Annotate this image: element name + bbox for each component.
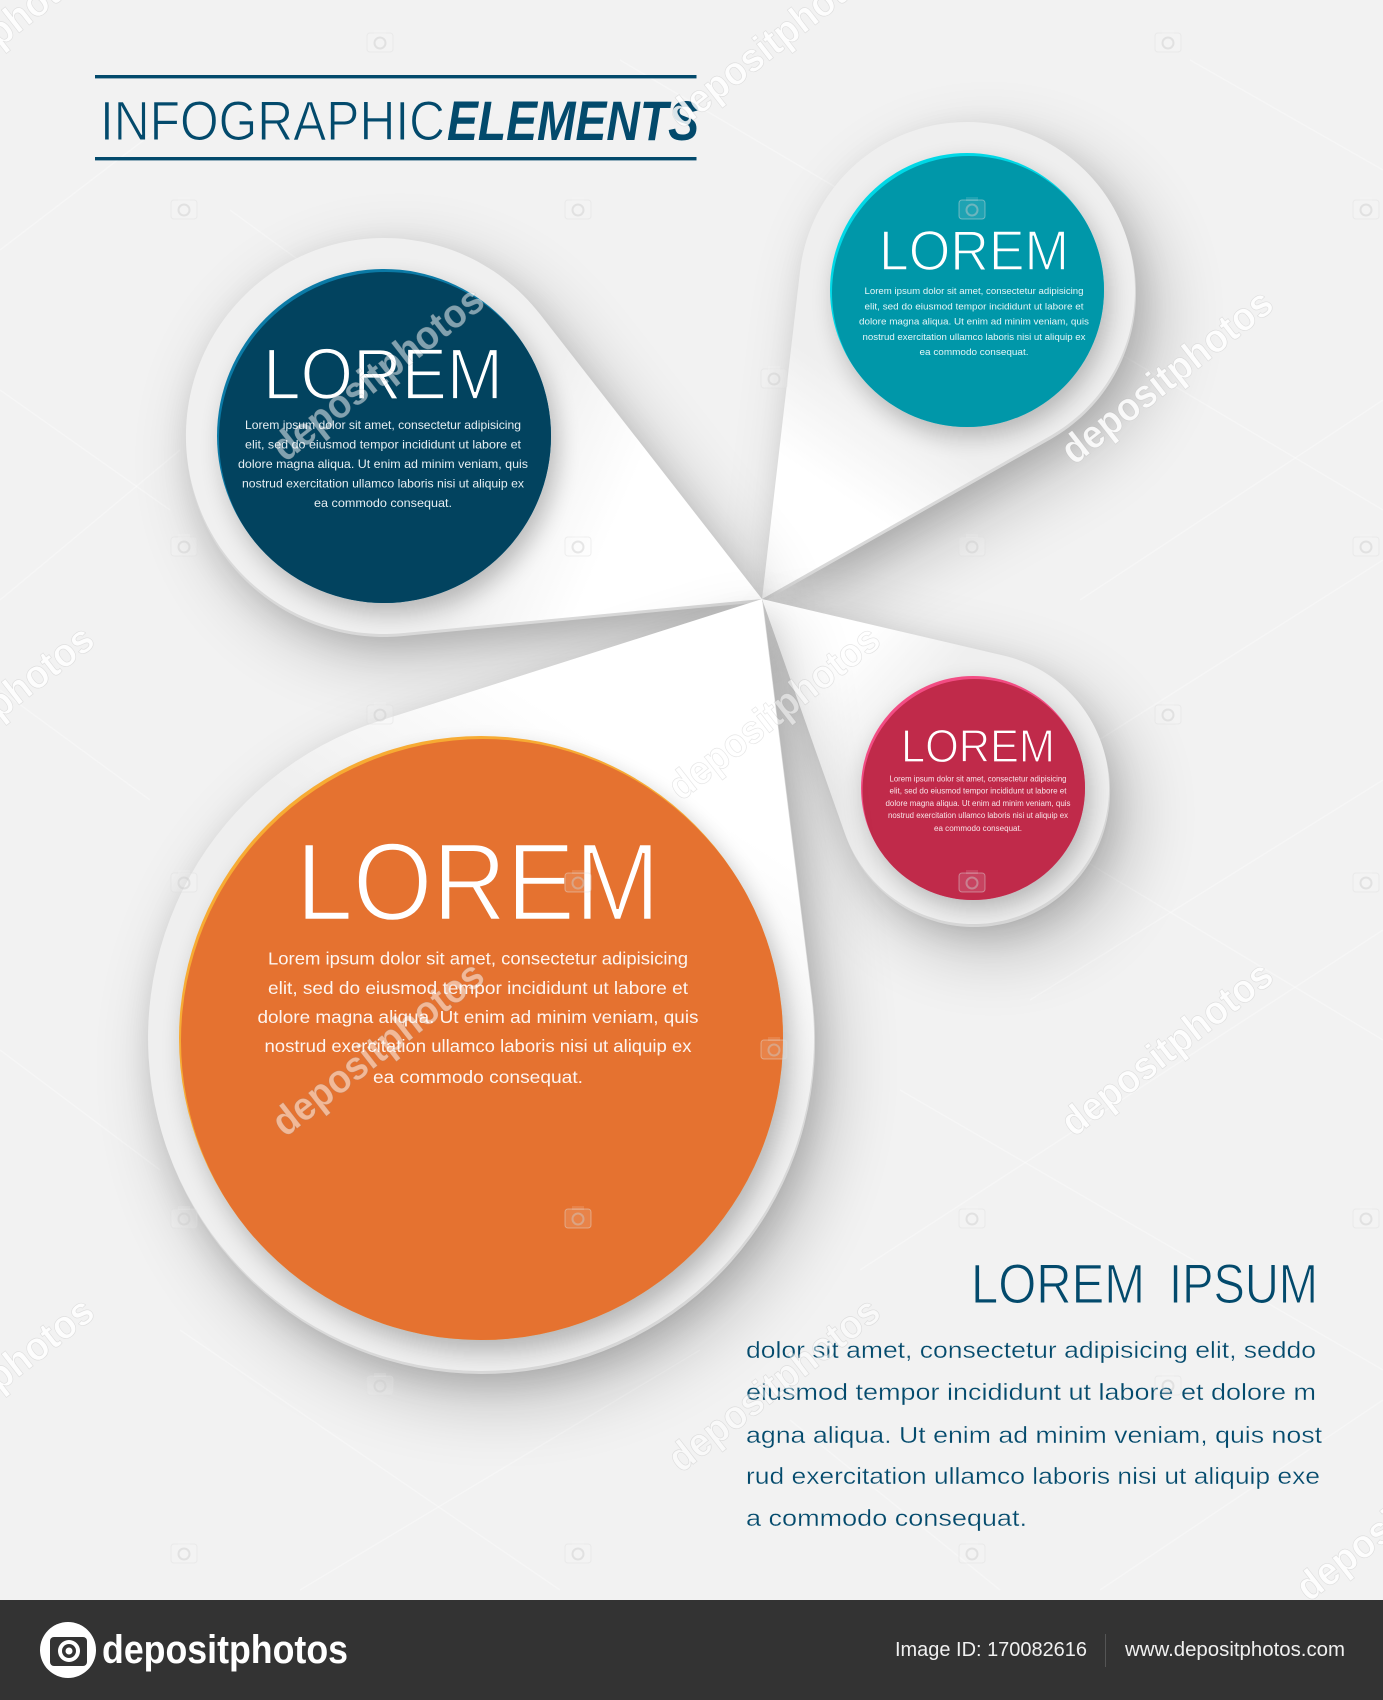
image id: Image ID: 170082616 — [895, 1639, 1087, 1661]
title: ELEMENTS — [447, 89, 699, 152]
title — [95, 75, 699, 160]
navy body text: ea commodo consequat. — [314, 497, 452, 510]
orange body text: Lorem ipsum dolor sit amet, consectetur adipisicing — [268, 949, 688, 969]
panel: navy teardrop — [186, 238, 778, 656]
text block: lorem ipsum: dolor sit amet, consectetur adipisicing elit, seddo — [746, 1337, 1316, 1363]
crimson body text: ea commodo consequat. — [934, 824, 1022, 833]
footer separator — [1105, 1634, 1106, 1667]
panel: crimson teardrop — [762, 599, 1129, 950]
text block: lorem ipsum: rud exercitation ullamco laboris nisi ut aliquip exe — [746, 1463, 1320, 1489]
orange heading: LOREM — [296, 821, 660, 944]
crimson circle — [861, 676, 1090, 909]
navy heading: LOREM — [263, 335, 503, 415]
watermark camera icons — [171, 30, 1379, 1563]
footer logo icon — [40, 1622, 96, 1678]
navy body text: dolore magna aliqua. Ut enim ad minim veniam, quis — [238, 458, 528, 471]
title: INFOGRAPHIC — [100, 89, 445, 152]
website: www.depositphotos.com — [1124, 1639, 1345, 1661]
orange body text: elit, sed do eiusmod tempor incididunt ut labore et — [268, 978, 688, 998]
teal body text: elit, sed do eiusmod tempor incididunt ut labore et — [864, 301, 1084, 312]
navy body text — [238, 419, 528, 510]
crimson heading: LOREM — [901, 720, 1055, 772]
orange body text: nostrud exercitation ullamco laboris nisi ut aliquip ex — [264, 1036, 692, 1056]
navy body text: nostrud exercitation ullamco laboris nisi ut aliquip ex — [242, 477, 524, 490]
orange body text: ea commodo consequat. — [373, 1067, 583, 1087]
teal body text: dolore magna aliqua. Ut enim ad minim veniam, quis — [859, 317, 1089, 328]
crimson body text: Lorem ipsum dolor sit amet, consectetur adipisicing — [890, 775, 1066, 784]
crimson body text: dolore magna aliqua. Ut enim ad minim veniam, quis — [886, 799, 1071, 808]
footer bar — [0, 1600, 1383, 1700]
text block: lorem ipsum: a commodo consequat. — [746, 1505, 1027, 1531]
orange body text — [258, 949, 699, 1087]
panel: orange teardrop — [148, 599, 830, 1399]
watermark text: depositphotos — [264, 278, 492, 470]
orange body text: dolore magna aliqua. Ut enim ad minim veniam, quis — [258, 1007, 699, 1027]
text block: lorem ipsum — [746, 1252, 1323, 1531]
teal body text: ea commodo consequat. — [920, 347, 1028, 358]
text block: lorem ipsum: IPSUM — [1169, 1252, 1318, 1315]
crimson body text: nostrud exercitation ullamco laboris nisi ut aliquip ex — [888, 811, 1068, 820]
watermark text: depositphotos — [1053, 953, 1281, 1145]
teal body text — [859, 286, 1089, 358]
teal circle — [830, 153, 1109, 437]
text block: lorem ipsum: agna aliqua. Ut enim ad minim veniam, quis nost — [746, 1422, 1323, 1448]
watermark text: depositphotos — [264, 953, 492, 1145]
crimson body text: elit, sed do eiusmod tempor incididunt ut labore et — [890, 787, 1067, 796]
navy body text: Lorem ipsum dolor sit amet, consectetur adipisicing — [245, 419, 521, 432]
text block: lorem ipsum: eiusmod tempor incididunt ut labore et dolore m — [746, 1379, 1316, 1405]
footer logo wordmark: depositphotos — [102, 1628, 348, 1672]
watermark text: depositphotos — [1053, 281, 1281, 473]
text block: lorem ipsum: LOREM — [971, 1252, 1145, 1315]
watermark text: depositphotos — [660, 1289, 888, 1481]
orange circle — [179, 736, 789, 1352]
crimson body text — [886, 775, 1071, 833]
teal heading: LOREM — [879, 219, 1069, 283]
navy body text: elit, sed do eiusmod tempor incididunt ut labore et — [245, 439, 522, 452]
teal body text: Lorem ipsum dolor sit amet, consectetur adipisicing — [864, 286, 1084, 297]
teal body text: nostrud exercitation ullamco laboris nisi ut aliquip ex — [862, 332, 1086, 343]
navy circle — [217, 269, 557, 614]
watermark text: depositphotos — [660, 617, 888, 809]
panel: teal teardrop — [762, 122, 1157, 625]
